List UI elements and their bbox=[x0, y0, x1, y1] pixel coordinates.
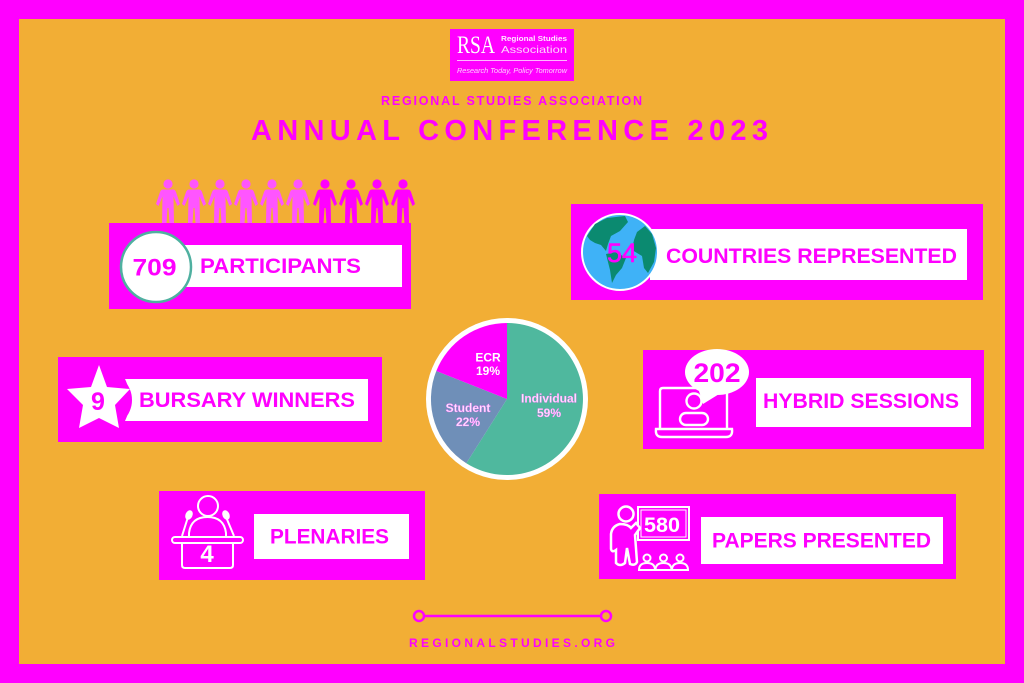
logo: RSA: RSA bbox=[457, 32, 495, 59]
panel: bursary winners bbox=[58, 357, 382, 442]
pie labels: Individual bbox=[521, 392, 577, 406]
logo: RSA: Regional Studies bbox=[501, 36, 567, 43]
label: papers presented: PAPERS PRESENTED bbox=[712, 528, 931, 552]
footer connector line bbox=[414, 611, 611, 621]
subtitle: REGIONAL STUDIES ASSOCIATION bbox=[381, 94, 642, 108]
icon: presenter with board and audience bbox=[611, 506, 689, 570]
footer website: REGIONALSTUDIES.ORG bbox=[409, 636, 615, 650]
icon: number circle bbox=[121, 232, 191, 302]
pie labels: 22% bbox=[456, 415, 480, 429]
logo: RSA: Research Today, Policy Tomorrow bbox=[457, 68, 568, 75]
panel: plenaries bbox=[159, 491, 425, 580]
icon: row of people bbox=[156, 179, 415, 223]
number: 9: 9 bbox=[91, 388, 105, 416]
pie labels: Student bbox=[446, 401, 490, 415]
pie labels bbox=[446, 350, 577, 429]
slice: individual bbox=[466, 323, 583, 475]
label: countries represented: COUNTRIES REPRESENTED bbox=[666, 244, 957, 268]
number: 4: 4 bbox=[200, 541, 214, 568]
icon: globe bbox=[582, 214, 658, 290]
number: 202: 202 bbox=[694, 358, 740, 388]
number: 580: 580 bbox=[644, 514, 680, 537]
pie labels: 19% bbox=[476, 364, 500, 378]
logo: RSA bbox=[450, 29, 574, 81]
panel: participants bbox=[109, 223, 411, 309]
title: ANNUAL CONFERENCE 2023 bbox=[251, 115, 768, 147]
pie labels: ECR bbox=[475, 350, 501, 364]
pie chart bbox=[426, 318, 588, 480]
icon: speaker at podium bbox=[172, 496, 243, 568]
slice: ECR bbox=[436, 323, 507, 399]
number: 709: 709 bbox=[132, 254, 176, 282]
label: hybrid sessions: HYBRID SESSIONS bbox=[763, 389, 959, 413]
label: bursary winners: BURSARY WINNERS bbox=[139, 388, 355, 412]
logo: RSA: Association bbox=[501, 44, 567, 56]
number: 54: 54 bbox=[607, 238, 637, 268]
label: participants: PARTICIPANTS bbox=[200, 254, 361, 278]
icon: star bbox=[67, 365, 130, 428]
label: plenaries: PLENARIES bbox=[270, 524, 389, 548]
slice: student bbox=[431, 371, 507, 463]
panel: papers presented bbox=[599, 494, 956, 579]
panel: countries bbox=[571, 204, 983, 300]
icon: speech bubble bbox=[685, 349, 749, 404]
panel: hybrid sessions bbox=[643, 349, 984, 449]
pie labels: 59% bbox=[537, 406, 561, 420]
icon: laptop with presenter bbox=[656, 388, 732, 437]
